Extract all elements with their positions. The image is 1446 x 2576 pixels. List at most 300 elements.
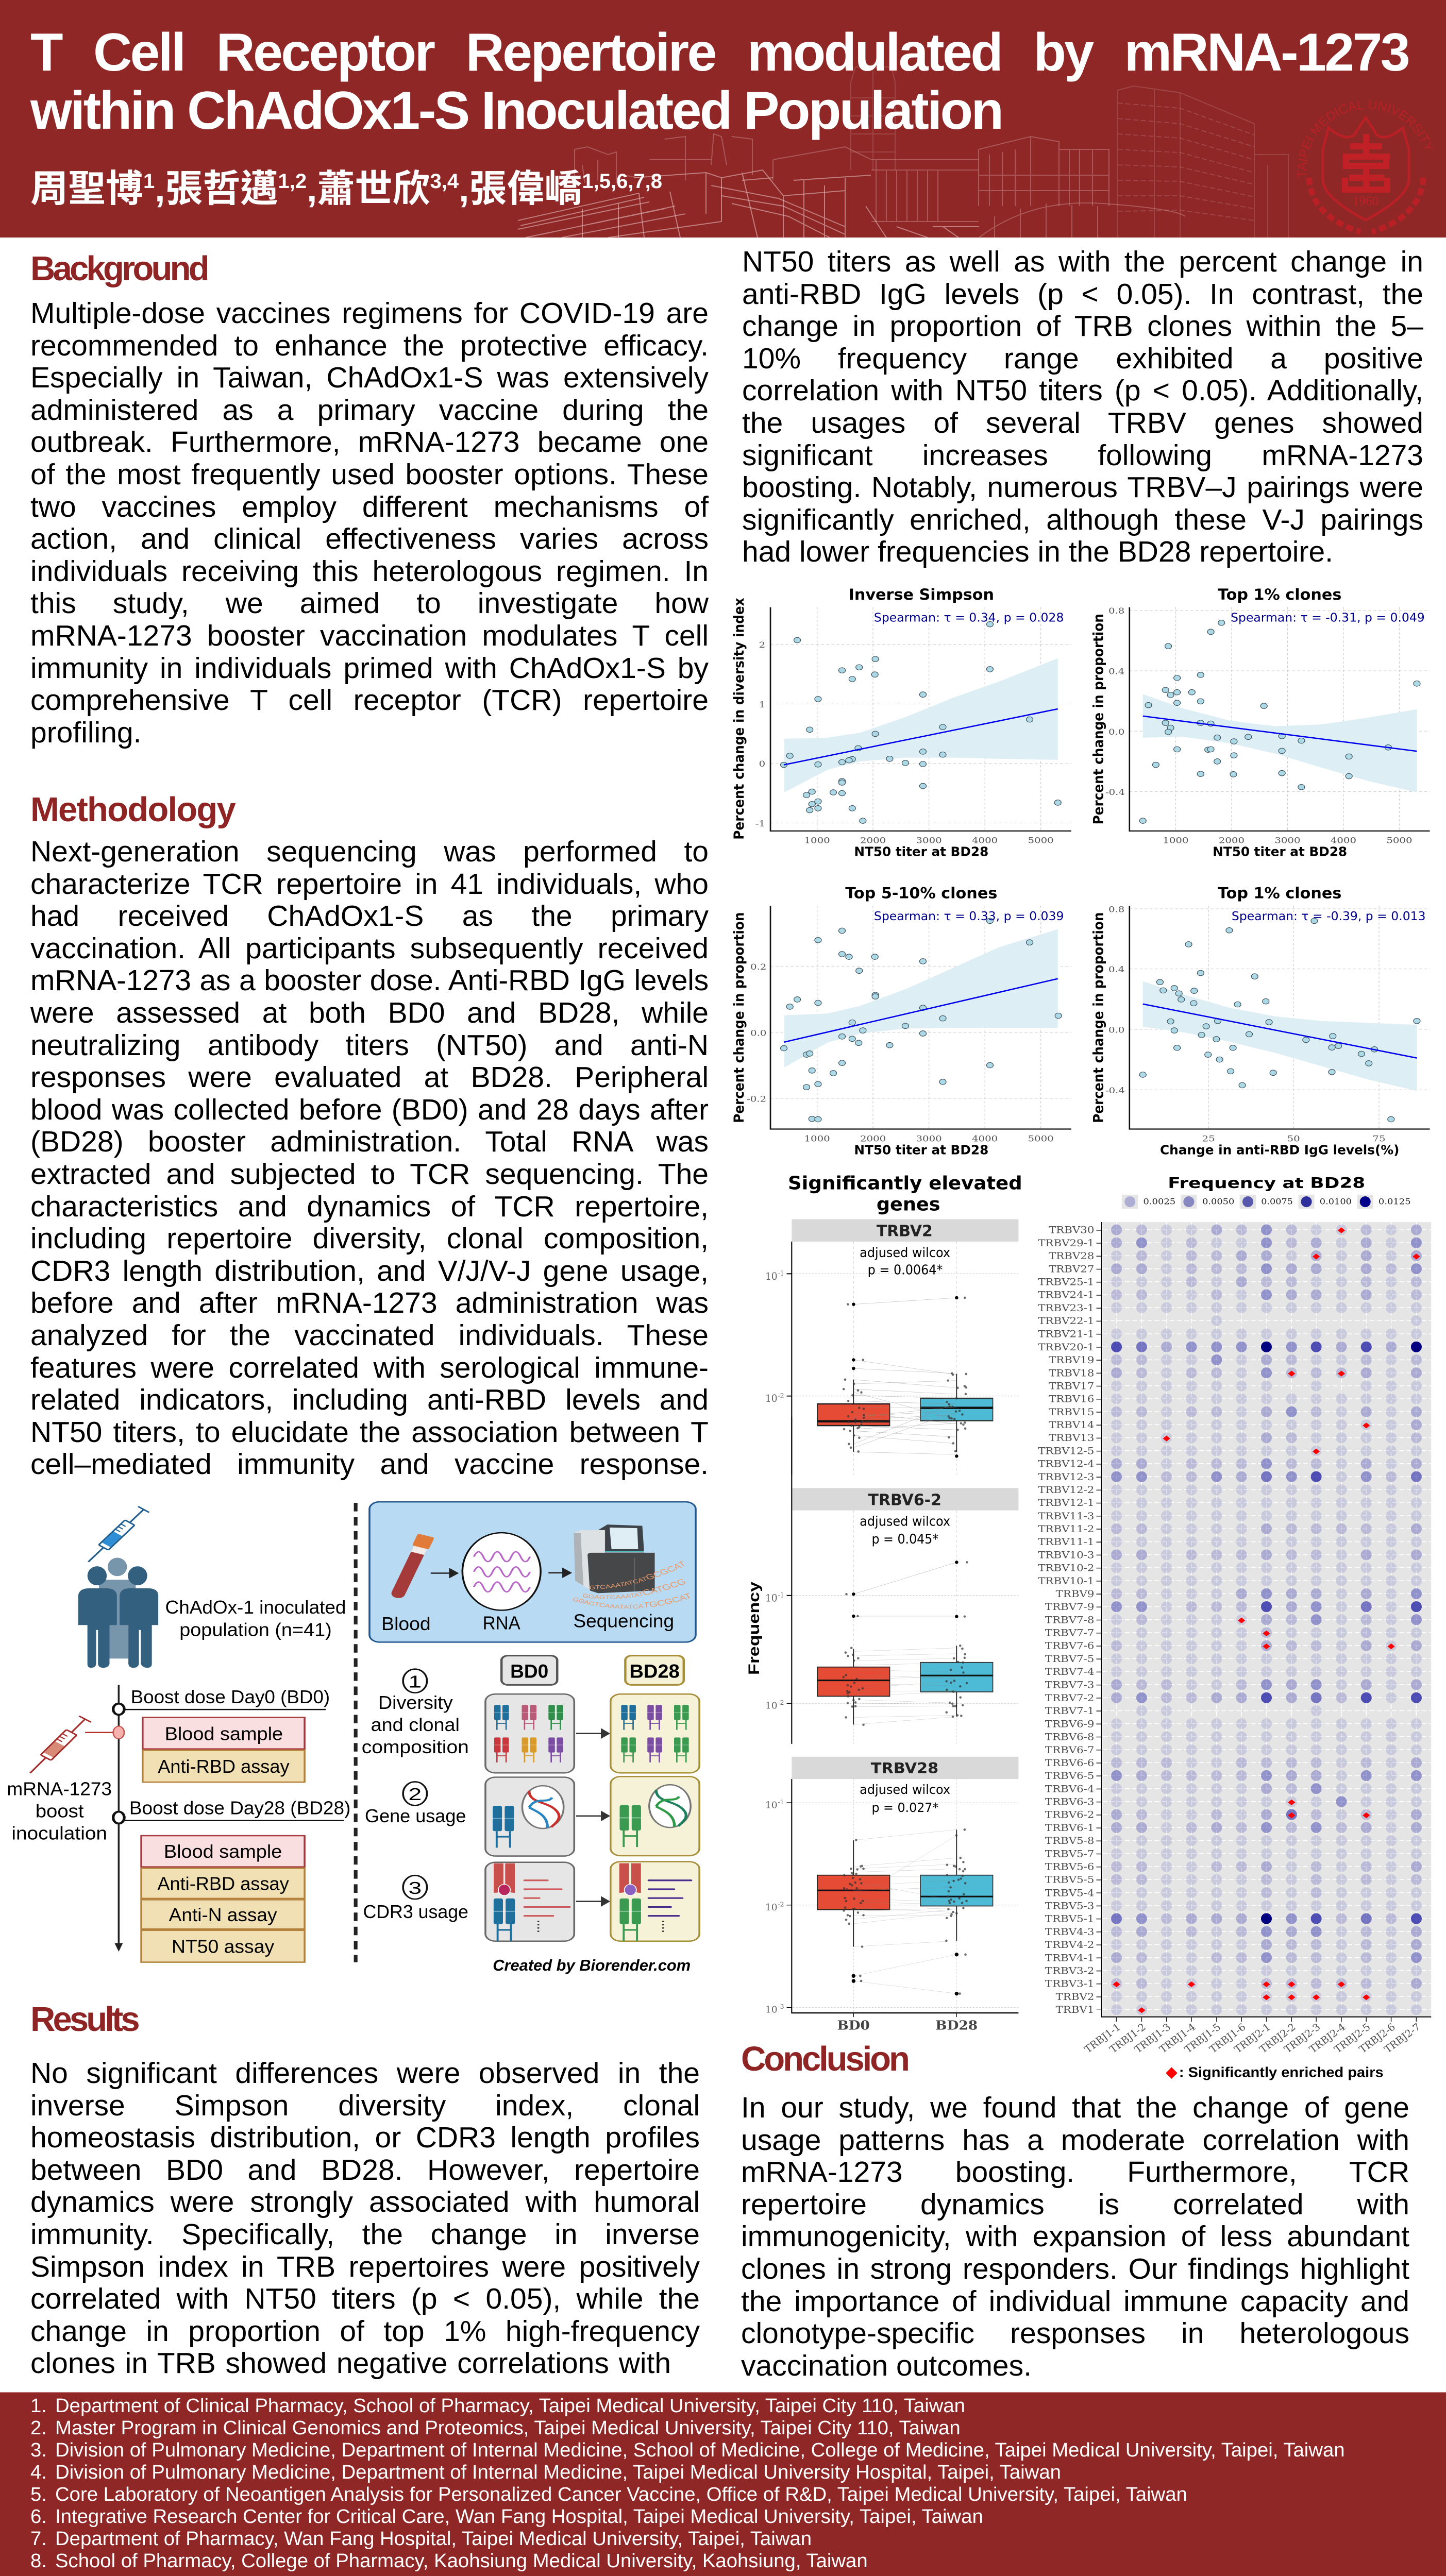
- text: methodology: related indicators, including anti-RBD levels and: [30, 1383, 709, 1416]
- x axis labels: TRBJ genes: TRBJ2-7: [1382, 2021, 1423, 2056]
- step 3: CDR3 usage: 3: [408, 1878, 422, 1897]
- y axis labels: TRBV genes: TRBV5-8: [1045, 1835, 1094, 1846]
- box plots: [721, 1164, 1051, 2040]
- y axis labels: TRBV genes: TRBV5-6: [1045, 1861, 1094, 1872]
- chart: top 5-10% clones: 4000: [972, 1134, 998, 1144]
- text: methodology: vaccination. All participants subsequently received: [30, 932, 709, 965]
- chart: inverse simpson: Inverse Simpson: [849, 586, 994, 603]
- panel: TRBV2: 10: [765, 1270, 778, 1282]
- label: boost dose day28: Boost dose Day28 (BD28): [129, 1798, 350, 1819]
- y axis labels: TRBV genes: TRBV11-3: [1038, 1510, 1094, 1522]
- arrow: blood to rna: [431, 1569, 458, 1577]
- text: results: No significant differences were observed in the: [30, 2057, 700, 2090]
- text: results continued: correlation with NT50 titers (p < 0.05). Additionally,: [742, 374, 1423, 407]
- panel: TRBV28: 10: [765, 1800, 778, 1811]
- text: results continued: significant increases following mRNA-1273: [742, 439, 1423, 472]
- y axis labels: TRBV genes: TRBV28: [1049, 1250, 1094, 1262]
- y axis labels: TRBV genes: TRBV14: [1049, 1419, 1094, 1431]
- panel: TRBV6-2: TRBV6-2: [868, 1491, 941, 1510]
- skyline illustration: [517, 66, 1289, 238]
- y axis labels: TRBV genes: TRBV29-1: [1038, 1237, 1094, 1249]
- text: methodology: before and after mRNA-1273 administration was: [30, 1286, 709, 1319]
- chart: top 5-10% clones: 1000: [804, 1134, 830, 1144]
- text: results: between BD0 and BD28. However, repertoire: [30, 2154, 700, 2187]
- chart: inverse simpson: 0: [759, 759, 765, 769]
- text: methodology: mRNA-1273 as a booster dose. Anti-RBD IgG levels: [30, 964, 709, 997]
- y axis labels: TRBV genes: TRBV7-8: [1045, 1614, 1094, 1625]
- text: results continued: change in proportion of TRB clones within the 5–: [742, 310, 1423, 343]
- footer: affiliations: 5.: [30, 2483, 47, 2505]
- colour legend: 0.0125: [1378, 1197, 1411, 1207]
- heading: background: Background: [30, 249, 207, 288]
- y axis labels: TRBV genes: TRBV10-1: [1038, 1575, 1094, 1586]
- chart: top 1% clones vs anti-RBD: 25: [1202, 1134, 1215, 1144]
- chart: top 5-10% clones: 2000: [860, 1134, 886, 1144]
- text: background: immunity in individuals primed with ChAdOx1-S by: [30, 652, 709, 685]
- study design figure: [7, 1501, 700, 1974]
- panel: TRBV6-2: -2: [778, 1699, 784, 1706]
- text: results continued: boosting. Notably, numerous TRBV–J pairings were: [742, 471, 1423, 504]
- x axis labels: TRBJ genes: TRBJ2-1: [1232, 2021, 1273, 2056]
- panel: TRBV28: BD28: [935, 2018, 978, 2033]
- x axis labels: TRBJ genes: TRBJ1-1: [1082, 2021, 1123, 2056]
- panel: TRBV28: -1: [778, 1798, 784, 1806]
- y axis labels: TRBV genes: TRBV7-4: [1045, 1666, 1094, 1677]
- heading: results: Results: [30, 2000, 138, 2039]
- labels: blood rna sequencing: RNA: [483, 1613, 520, 1634]
- sequence letters: [573, 1561, 690, 1608]
- y axis labels: TRBV genes: TRBV12-2: [1038, 1484, 1094, 1496]
- step 2: gene usage: Gene usage: [365, 1806, 466, 1826]
- text: results continued: anti-RBD IgG levels (p < 0.05). In contrast, the: [742, 278, 1423, 311]
- x axis labels: TRBJ genes: TRBJ2-4: [1307, 2021, 1348, 2056]
- label: inoculated population: ChAdOx-1 inoculated: [165, 1598, 346, 1618]
- text: methodology: neutralizing antibody titers (NT50) and anti-N: [30, 1029, 709, 1062]
- assay boxes day28: Anti-N assay: [169, 1905, 277, 1925]
- chart: inverse simpson: 2: [759, 640, 765, 650]
- dot plot: frequency at BD28: [1031, 1164, 1446, 2087]
- chart: top 1% clones vs anti-RBD: Percent change in proportion: [1090, 912, 1106, 1123]
- chart: top 1% clones vs anti-RBD: 0.0: [1108, 1025, 1124, 1035]
- arrow: diversity BD0 to BD28: [576, 1730, 609, 1737]
- chart: inverse simpson: 4000: [972, 836, 998, 845]
- text: methodology: Next-generation sequencing was performed to: [30, 835, 709, 868]
- footer: affiliations: Master Program in Clinical Genomics and Proteomics, Taipei Medical University, Taipei City 110, Taiwan: [55, 2417, 961, 2439]
- panel: CDR3 BD28: [611, 1861, 699, 1941]
- icon: population: [78, 1557, 158, 1668]
- chart: inverse simpson: 3000: [916, 836, 942, 845]
- panel: TRBV28: 10: [765, 2005, 778, 2015]
- footer: affiliations: Division of Pulmonary Medicine, Department of Internal Medicine, Taipei Medical University Hospital, Taipei, Taiwan: [55, 2461, 1061, 2483]
- text: methodology: were assessed at both BD0 and BD28, while: [30, 996, 709, 1029]
- panel: TRBV28: 10: [765, 1902, 778, 1913]
- chart: top 1% clones vs NT50: Top 1% clones: [1218, 586, 1341, 603]
- step 1: diversity and clonal composition: 1: [408, 1672, 422, 1691]
- labels: blood rna sequencing: Blood: [381, 1614, 431, 1634]
- footer: affiliations: 8.: [30, 2550, 47, 2572]
- x axis labels: TRBJ genes: [1082, 2021, 1423, 2056]
- y axis labels: TRBV genes: TRBV12-5: [1038, 1445, 1094, 1456]
- label: mRNA-1273 boost inoculation: mRNA-1273: [7, 1779, 112, 1800]
- icon: rna circle: [462, 1533, 541, 1611]
- text: conclusion: usage patterns has a moderate correlation with: [741, 2124, 1409, 2157]
- y axis labels: TRBV genes: TRBV7-1: [1045, 1705, 1094, 1717]
- colour legend: 0.0025: [1143, 1197, 1175, 1207]
- chart: top 1% clones vs anti-RBD: -0.4: [1105, 1086, 1125, 1095]
- label: inoculated population: population (n=41): [179, 1620, 332, 1640]
- y axis labels: TRBV genes: TRBV12-3: [1038, 1471, 1094, 1482]
- chart: top 5-10% clones: 0.0: [750, 1028, 766, 1038]
- icon: sequencer: [574, 1524, 655, 1593]
- chart: top 1% clones vs anti-RBD: 50: [1287, 1134, 1300, 1144]
- y axis labels: TRBV genes: TRBV6-8: [1045, 1731, 1094, 1742]
- chart: inverse simpson: 1000: [804, 836, 830, 845]
- y axis labels: TRBV genes: TRBV6-3: [1045, 1796, 1094, 1807]
- x axis labels: TRBJ genes: TRBJ2-3: [1282, 2021, 1322, 2056]
- chart: top 1% clones vs anti-RBD: 75: [1372, 1134, 1386, 1144]
- chart: top 1% clones vs anti-RBD: 0.8: [1108, 905, 1124, 914]
- text: background: this study, we aimed to investigate how: [30, 587, 709, 620]
- y axis labels: TRBV genes: TRBV12-1: [1038, 1497, 1094, 1509]
- chart: top 1% clones vs NT50: 0.0: [1108, 727, 1124, 737]
- text: results continued: the usages of several TRBV genes showed: [742, 406, 1423, 439]
- title: significantly elevated genes: genes: [877, 1194, 940, 1215]
- text: background: recommended to enhance the protective efficacy.: [30, 329, 709, 362]
- step 1: diversity and clonal composition: Diversity: [378, 1693, 453, 1713]
- text: background: profiling.: [30, 716, 141, 749]
- chart: top 1% clones vs NT50: NT50 titer at BD28: [1213, 844, 1347, 859]
- arrow: rna to sequencing: [548, 1569, 570, 1577]
- x axis labels: TRBJ genes: TRBJ1-3: [1132, 2021, 1173, 2056]
- label: boost dose day0: Boost dose Day0 (BD0): [131, 1687, 330, 1707]
- y axis labels: TRBV genes: TRBV3-1: [1045, 1978, 1094, 1989]
- university logo: TAIPEI MEDICAL UNIVERSITY: [1298, 100, 1434, 178]
- step 2: gene usage: 2: [408, 1785, 422, 1804]
- tag: BD28: [625, 1656, 684, 1685]
- title: significantly elevated genes: Significantly elevated: [788, 1173, 1022, 1194]
- footer: affiliations: 2.: [30, 2417, 47, 2439]
- y axis labels: TRBV genes: TRBV15: [1049, 1406, 1094, 1417]
- base dots: [1117, 1230, 1416, 2010]
- text: background: outbreak. Furthermore, mRNA-1273 became one: [30, 426, 709, 459]
- panel: TRBV6-2: -1: [778, 1591, 784, 1599]
- footer: affiliations: 1.: [30, 2395, 47, 2417]
- text: background: [30, 297, 709, 749]
- footer: affiliations: Core Laboratory of Neoantigen Analysis for Personalized Cancer Vaccine, Office of R&D, Taipei Medical University, Taipei, Taiwan: [55, 2483, 1187, 2505]
- text: results: inverse Simpson diversity index, clonal: [30, 2089, 700, 2122]
- y axis labels: TRBV genes: TRBV17: [1049, 1380, 1094, 1392]
- footer: affiliations: 3.: [30, 2439, 47, 2461]
- footer: affiliations: 7.: [30, 2528, 47, 2550]
- text: results: Simpson index in TRB repertoires were positively: [30, 2250, 700, 2283]
- y axis labels: TRBV genes: TRBV6-5: [1045, 1770, 1094, 1782]
- y axis labels: TRBV genes: TRBV30: [1049, 1224, 1094, 1235]
- y axis labels: TRBV genes: TRBV5-3: [1045, 1900, 1094, 1911]
- step 3: CDR3 usage: CDR3 usage: [363, 1902, 468, 1922]
- y axis labels: TRBV genes: TRBV7-9: [1045, 1601, 1094, 1613]
- plot title: Frequency at BD28: [1168, 1174, 1365, 1192]
- chart: inverse simpson: 2000: [860, 836, 886, 845]
- y axis labels: TRBV genes: TRBV7-3: [1045, 1679, 1094, 1690]
- university logo: 1960: [1353, 194, 1378, 208]
- plot area: [1099, 1222, 1431, 2022]
- y axis labels: TRBV genes: [1038, 1224, 1094, 2015]
- heading: methodology: Methodology: [30, 790, 235, 829]
- step 1: diversity and clonal composition: and clonal: [371, 1715, 460, 1735]
- text: methodology: (BD28) booster administration. Total RNA was: [30, 1125, 709, 1158]
- icon: blood tube: [388, 1534, 434, 1600]
- y axis labels: TRBV genes: TRBV4-1: [1045, 1952, 1094, 1963]
- shaded dots: [1117, 1230, 1416, 1984]
- x axis labels: TRBJ genes: TRBJ1-5: [1182, 2021, 1223, 2056]
- colour legend: 0.0100: [1320, 1197, 1352, 1207]
- text: background: individuals receiving this heterologous regimen. In: [30, 555, 709, 588]
- text: background: two vaccines employ different mechanisms of: [30, 490, 709, 523]
- y axis labels: TRBV genes: TRBV6-9: [1045, 1718, 1094, 1730]
- text: methodology: features were correlated with serological immune-: [30, 1351, 709, 1384]
- text: methodology: including repertoire diversity, clonal composition,: [30, 1222, 709, 1255]
- assay boxes day0: Blood sample: [165, 1724, 283, 1744]
- chart: top 5-10% clones: 0.2: [750, 962, 766, 972]
- footer: affiliations: [0, 2392, 1446, 2576]
- x axis labels: TRBJ genes: TRBJ1-6: [1207, 2021, 1248, 2056]
- assay boxes day28: NT50 assay: [172, 1937, 274, 1957]
- y axis labels: TRBV genes: TRBV20-1: [1038, 1341, 1094, 1353]
- step 2: gene usage: [365, 1782, 466, 1826]
- text: conclusion: repertoire dynamics is correlated with: [741, 2188, 1409, 2221]
- y axis labels: TRBV genes: TRBV5-1: [1045, 1913, 1094, 1924]
- x axis labels: TRBJ genes: TRBJ2-2: [1257, 2021, 1298, 2056]
- chart: inverse simpson: [731, 586, 1071, 859]
- y axis labels: TRBV genes: TRBV13: [1049, 1432, 1094, 1444]
- labels: blood rna sequencing: Sequencing: [574, 1611, 674, 1632]
- y axis labels: TRBV genes: TRBV18: [1049, 1367, 1094, 1379]
- text: conclusion: the importance of individual immune capacity and: [741, 2285, 1409, 2318]
- text: methodology: analyzed for the vaccinated individuals. These: [30, 1319, 709, 1352]
- chart: top 1% clones vs NT50: Percent change in proportion: [1090, 614, 1106, 824]
- chart: top 1% clones vs anti-RBD: [1090, 885, 1430, 1158]
- footer: affiliations: 6.: [30, 2505, 47, 2528]
- text: results continued: NT50 titers as well as with the percent change in: [742, 245, 1423, 278]
- y axis labels: TRBV genes: TRBV24-1: [1038, 1289, 1094, 1300]
- y axis labels: TRBV genes: TRBV7-6: [1045, 1640, 1094, 1651]
- text: background: administered as a primary vaccine during the: [30, 394, 709, 427]
- chart: inverse simpson: NT50 titer at BD28: [854, 844, 988, 859]
- enriched pair markers: [1113, 1227, 1420, 2013]
- text: background: comprehensive T cell receptor (TCR) repertoire: [30, 684, 709, 717]
- scatter plots: [731, 586, 1430, 1158]
- y axis labels: TRBV genes: TRBV6-1: [1045, 1822, 1094, 1834]
- chart: top 1% clones vs anti-RBD: 0.4: [1108, 965, 1124, 975]
- chart: top 1% clones vs anti-RBD: Change in anti-RBD IgG levels(%): [1160, 1142, 1399, 1158]
- chart: top 1% clones vs anti-RBD: Top 1% clones: [1218, 885, 1341, 902]
- chart: top 5-10% clones: Spearman: τ = 0.33, p = 0.039: [874, 909, 1064, 923]
- authors: 周聖博1,張哲邁1,2,蕭世欣3,4,張偉嶠1,5,6,7,8: [30, 168, 662, 210]
- title: within ChAdOx1-S Inoculated Population: [30, 81, 1002, 141]
- panel: TRBV6-2: [765, 1417, 1018, 1744]
- chart: top 1% clones vs NT50: [1090, 586, 1430, 859]
- text: results continued: significantly enriched, although these V-J pairings: [742, 503, 1423, 536]
- assay boxes day28: Anti-RBD assay: [157, 1874, 289, 1894]
- y axis labels: TRBV genes: TRBV1: [1056, 2004, 1094, 2015]
- assay boxes day0: [143, 1717, 305, 1782]
- y axis labels: TRBV genes: TRBV4-3: [1045, 1926, 1094, 1938]
- panel: TRBV2: TRBV2: [877, 1222, 933, 1241]
- text: methodology: cell–mediated immunity and vaccine response.: [30, 1448, 709, 1481]
- panel: TRBV2: -2: [778, 1392, 784, 1400]
- text: results continued: [742, 245, 1423, 568]
- header banner: [0, 0, 1446, 238]
- footer: affiliations: School of Pharmacy, College of Pharmacy, Kaohsiung Medical University, Kaohsiung, Taiwan: [55, 2550, 868, 2572]
- y axis labels: TRBV genes: TRBV2: [1056, 1991, 1094, 2002]
- chart: top 5-10% clones: Percent change in proportion: [731, 912, 747, 1123]
- text: background: mRNA-1273 booster vaccination modulates T cell: [30, 619, 709, 652]
- chart: top 1% clones vs NT50: 2000: [1219, 836, 1245, 845]
- university logo: [1298, 100, 1434, 235]
- sequence letters: GTCAAATATCATGCGCAT: [590, 1561, 684, 1590]
- arrow: CDR3 BD0 to BD28: [576, 1897, 609, 1905]
- y axis labels: TRBV genes: TRBV6-2: [1045, 1809, 1094, 1820]
- y axis labels: TRBV genes: TRBV21-1: [1038, 1328, 1094, 1340]
- footer: affiliations: Department of Pharmacy, Wan Fang Hospital, Taipei Medical University, Taipei, Taiwan: [55, 2528, 812, 2550]
- y axis labels: TRBV genes: TRBV7-2: [1045, 1692, 1094, 1704]
- chart: top 1% clones vs NT50: 1000: [1163, 836, 1189, 845]
- text: results: homeostasis distribution, or CDR3 length profiles: [30, 2121, 700, 2154]
- colour legend: [1122, 1197, 1411, 1207]
- text: background: Especially in Taiwan, ChAdOx1-S was extensively: [30, 361, 709, 394]
- text: results continued: had lower frequencies in the BD28 repertoire.: [742, 535, 1333, 568]
- y axis labels: TRBV genes: TRBV23-1: [1038, 1302, 1094, 1313]
- title: T Cell Receptor Repertoire modulated by mRNA-1273: [30, 23, 1408, 82]
- text: results: change in proportion of top 1% high-frequency: [30, 2315, 700, 2348]
- text: methodology: extracted and subjected to TCR sequencing. The: [30, 1158, 709, 1191]
- y axis labels: TRBV genes: TRBV4-2: [1045, 1939, 1094, 1951]
- panel: TRBV28: TRBV28: [871, 1760, 938, 1777]
- chart: top 1% clones vs NT50: 5000: [1386, 836, 1413, 845]
- chart: top 1% clones vs NT50: 0.8: [1108, 606, 1124, 616]
- chart: top 1% clones vs NT50: 0.4: [1108, 667, 1124, 676]
- y axis labels: TRBV genes: TRBV6-6: [1045, 1757, 1094, 1769]
- text: results: [30, 2057, 700, 2380]
- arrow: gene usage BD0 to BD28: [576, 1812, 609, 1820]
- text: methodology: [30, 835, 709, 1481]
- legend: significantly enriched pairs: : Significantly enriched pairs: [1179, 2064, 1384, 2080]
- axis label: frequency: Frequency: [746, 1582, 763, 1675]
- panel: gene usage BD0: [485, 1777, 574, 1856]
- panel: diversity BD0: [485, 1694, 574, 1773]
- timeline: [85, 1685, 344, 1952]
- chart: top 5-10% clones: Top 5-10% clones: [845, 885, 997, 902]
- panel: TRBV2: p = 0.0064*: [868, 1263, 943, 1278]
- panel: CDR3 BD0: [485, 1862, 574, 1941]
- credit: Created by Biorender.com: [493, 1956, 691, 1974]
- colour legend: 0.0075: [1261, 1197, 1293, 1207]
- text: methodology: had received ChAdOx1-S as the primary: [30, 900, 709, 933]
- assay boxes day0: Anti-RBD assay: [158, 1757, 290, 1777]
- panel: TRBV28: adjused wilcox: [860, 1782, 950, 1797]
- title: [30, 23, 1408, 141]
- text: background: Multiple-dose vaccines regimens for COVID-19 are: [30, 297, 709, 330]
- label: mRNA-1273 boost inoculation: [7, 1779, 112, 1844]
- y axis labels: TRBV genes: TRBV10-2: [1038, 1562, 1094, 1573]
- tag: BD0: BD0: [510, 1660, 548, 1682]
- panel: TRBV28: [765, 1757, 1018, 2033]
- text: conclusion: clonotype-specific responses in heterologous: [741, 2317, 1409, 2350]
- y axis labels: TRBV genes: TRBV5-7: [1045, 1848, 1094, 1859]
- y axis labels: TRBV genes: TRBV10-3: [1038, 1549, 1094, 1561]
- labels: blood rna sequencing: [381, 1611, 674, 1634]
- text: methodology: CDR3 length distribution, and V/J/V-J gene usage,: [30, 1255, 709, 1287]
- chart: top 5-10% clones: 5000: [1028, 1134, 1054, 1144]
- y axis labels: TRBV genes: TRBV19: [1049, 1354, 1094, 1366]
- panel: diversity BD28: [611, 1694, 699, 1773]
- chart: top 5-10% clones: NT50 titer at BD28: [854, 1142, 988, 1158]
- text: results: clones in TRB showed negative correlations with: [30, 2347, 671, 2380]
- text: conclusion: vaccination outcomes.: [741, 2349, 1032, 2382]
- panel: TRBV6-2: adjused wilcox: [860, 1514, 950, 1530]
- panel: TRBV2: 10: [765, 1393, 778, 1404]
- icon: red syringe: [24, 1716, 91, 1776]
- chart: inverse simpson: Percent change in diversity index: [731, 598, 747, 840]
- y axis labels: TRBV genes: TRBV5-5: [1045, 1874, 1094, 1885]
- text: methodology: responses were evaluated at BD28. Peripheral: [30, 1061, 709, 1094]
- chart: top 1% clones vs NT50: -0.4: [1105, 788, 1125, 798]
- text: conclusion: In our study, we found that the change of gene: [741, 2091, 1409, 2124]
- text: background: of the most frequently used booster options. These: [30, 458, 709, 491]
- x axis labels: TRBJ genes: TRBJ2-5: [1332, 2021, 1373, 2056]
- panel: TRBV6-2: 10: [765, 1701, 778, 1711]
- x axis labels: TRBJ genes: TRBJ2-6: [1357, 2021, 1398, 2056]
- y axis labels: TRBV genes: TRBV11-2: [1038, 1523, 1094, 1535]
- step 3: CDR3 usage: [363, 1875, 468, 1922]
- text: background: action, and clinical effectiveness varies across: [30, 522, 709, 555]
- footer: affiliations: Department of Clinical Pharmacy, School of Pharmacy, Taipei Medical University, Taipei City 110, Taiwan: [55, 2395, 965, 2417]
- panel: TRBV28: BD0: [837, 2018, 870, 2033]
- text: methodology: characteristics and dynamics of TCR repertoire,: [30, 1190, 709, 1223]
- y axis labels: TRBV genes: TRBV22-1: [1038, 1315, 1094, 1327]
- chart: top 1% clones vs NT50: 4000: [1331, 836, 1356, 845]
- text: results continued: 10% frequency range exhibited a positive: [742, 342, 1423, 375]
- label: mRNA-1273 boost inoculation: boost: [36, 1801, 83, 1822]
- panel: TRBV28: -2: [778, 1901, 784, 1908]
- text: methodology: NT50 titers, to elucidate the association between T: [30, 1416, 709, 1449]
- y axis labels: TRBV genes: TRBV12-4: [1038, 1458, 1094, 1469]
- y axis labels: TRBV genes: TRBV3-2: [1045, 1965, 1094, 1976]
- y axis labels: TRBV genes: TRBV6-4: [1045, 1783, 1094, 1794]
- assay boxes day28: Blood sample: [164, 1842, 282, 1862]
- text: conclusion: clones in strong responders. Our findings highlight: [741, 2252, 1409, 2285]
- text: results: dynamics were strongly associated with humoral: [30, 2185, 700, 2218]
- chart: top 1% clones vs NT50: 3000: [1274, 836, 1301, 845]
- sequence letters: GGAGTCAAATATCATGCG: [583, 1579, 685, 1599]
- chart: inverse simpson: -1: [755, 819, 765, 829]
- panel: TRBV6-2: p = 0.045*: [871, 1532, 939, 1547]
- text: conclusion: [741, 2092, 1409, 2382]
- chart: inverse simpson: 5000: [1028, 836, 1054, 845]
- y axis labels: TRBV genes: TRBV7-5: [1045, 1653, 1094, 1665]
- tag: BD28: BD28: [629, 1660, 680, 1682]
- tag: BD0: [501, 1656, 557, 1685]
- y axis labels: TRBV genes: TRBV25-1: [1038, 1276, 1094, 1287]
- heading: conclusion: Conclusion: [741, 2040, 908, 2078]
- text: methodology: characterize TCR repertoire in 41 individuals, who: [30, 868, 709, 901]
- panel: TRBV2: [765, 1219, 1018, 1475]
- footer: affiliations: Integrative Research Center for Critical Care, Wan Fang Hospital, Taipei Medical University, Taipei, Taiwan: [55, 2505, 983, 2528]
- panel: TRBV2: adjused wilcox: [860, 1245, 950, 1261]
- y axis labels: TRBV genes: TRBV27: [1049, 1263, 1094, 1275]
- text: methodology: blood was collected before (BD0) and 28 days after: [30, 1093, 709, 1126]
- y axis labels: TRBV genes: TRBV9: [1056, 1588, 1094, 1600]
